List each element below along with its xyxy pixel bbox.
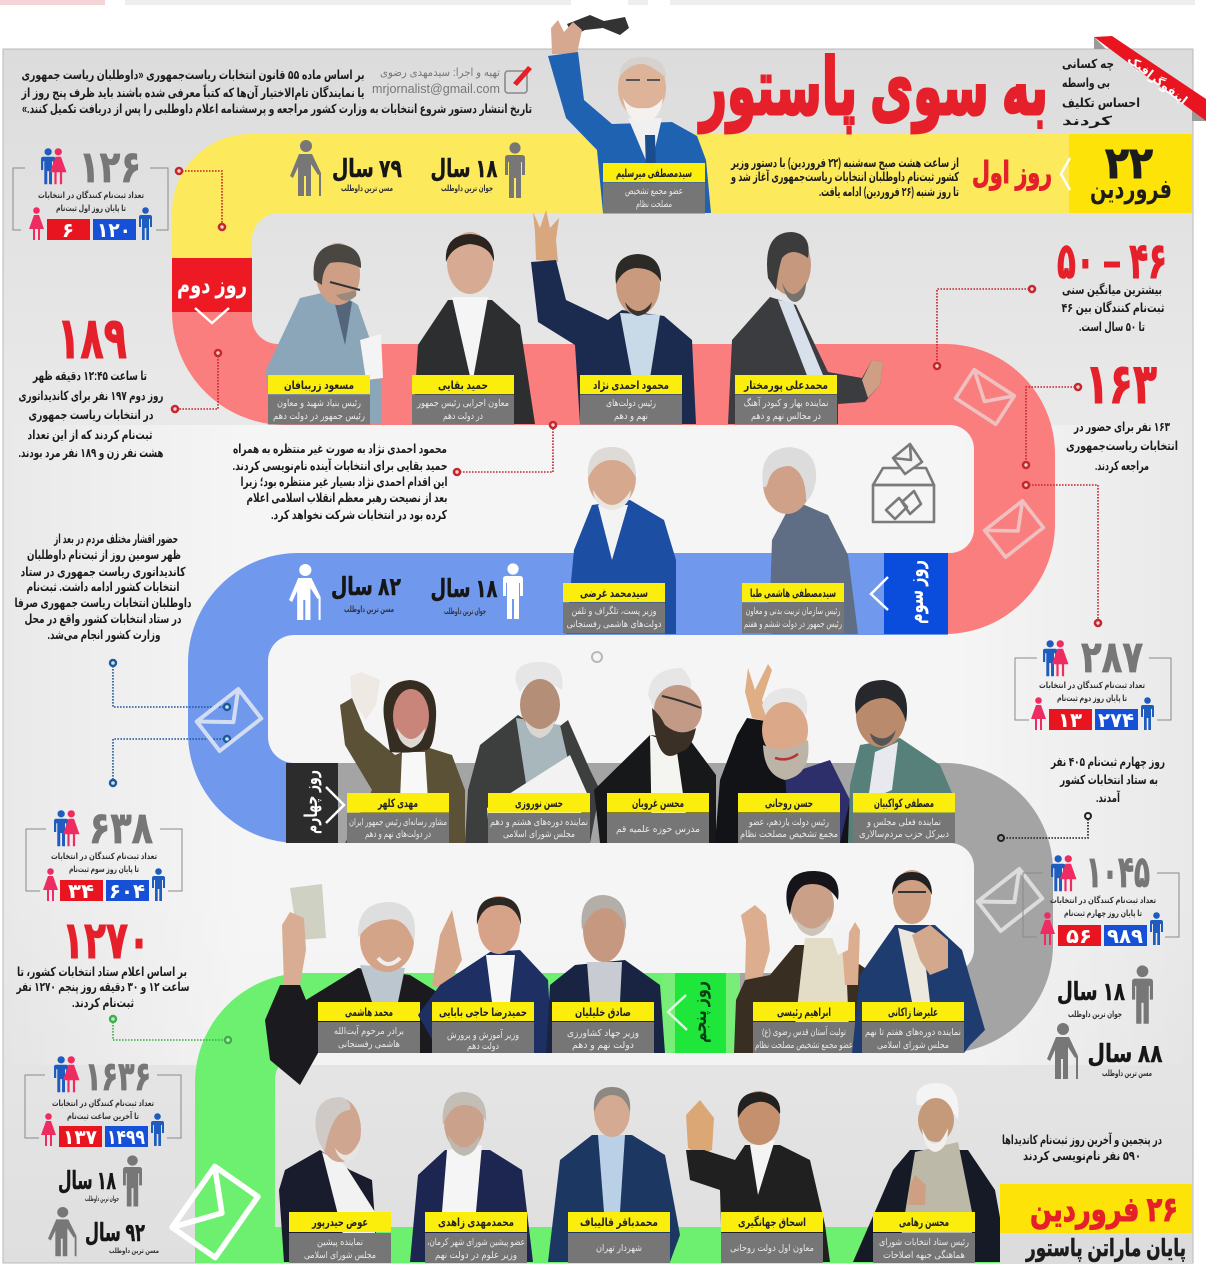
name label: حسن نوروزی xyxy=(515,798,563,811)
stat box: 1636: ۱۶۳۶ xyxy=(85,1055,151,1099)
stat: 189: ثبت‌نام کردند که از این تعداد xyxy=(28,428,152,443)
name label xyxy=(347,793,449,843)
name label xyxy=(412,375,514,424)
date number: ۲۲ xyxy=(1105,139,1153,188)
intro paragraph: یا نمایندگان تام‌الاختیار آن‌ها که کتباً معرفی شده باشند باید ظرف پنج روز از xyxy=(21,83,365,101)
name label xyxy=(268,375,370,424)
name label: رئیس دولت یازدهم، عضو xyxy=(748,817,829,828)
stat box: 287: تعداد ثبت‌نام کنندگان در انتخابات xyxy=(1039,680,1145,691)
name label: در مجالس نهم و دهم xyxy=(751,411,821,422)
day four note: آمدند. xyxy=(1096,790,1120,805)
name label: هماهنگی جبهه اصلاحات xyxy=(883,1249,965,1261)
day four note: به ستاد انتخابات کشور xyxy=(1059,773,1158,787)
candidate: Jahangiri xyxy=(686,1091,830,1263)
name label: وزیر پست، تلگراف و تلفن xyxy=(572,605,656,617)
name label xyxy=(607,793,709,843)
name label xyxy=(753,1002,855,1053)
name label: رئیس جمهور در دولت ششم و هفتم xyxy=(744,619,842,630)
name label: مسعود زرببافان xyxy=(284,380,354,393)
soft light area behind ribbon xyxy=(3,425,1193,1065)
name label: مجلس شورای اسلامی xyxy=(503,829,575,840)
name label xyxy=(580,375,682,424)
name label xyxy=(873,1212,975,1263)
stat: age range 46-50: تا ۵۰ سال است. xyxy=(1079,320,1145,334)
stat: 1270: ثبت‌نام کردند. xyxy=(72,996,134,1011)
name label: رئیس بنیاد شهید و معاون xyxy=(277,398,361,409)
connector: day four xyxy=(998,813,1091,841)
name label: محمد هاشمی xyxy=(345,1007,393,1019)
month: فروردین xyxy=(1090,174,1172,205)
ahmadinejad note xyxy=(232,442,448,522)
name label: مشاور رسانه‌ای رئیس جمهور ایران xyxy=(349,817,447,828)
connector: 126 xyxy=(176,168,225,230)
ahmadinejad note: کرده بود در انتخابات شرکت نخواهد کرد. xyxy=(271,508,448,522)
photo xyxy=(566,447,676,634)
stat: 189: ۱۸۹ xyxy=(57,306,127,371)
day two label xyxy=(172,258,252,323)
stat: 189: روز دوم ۱۹۷ نفر برای کاندیداتوری xyxy=(19,389,164,404)
stat: age range 46-50 xyxy=(1057,233,1167,334)
name label: نماینده فعلی مجلس و xyxy=(866,817,941,828)
oldest age day five: مسن ترین داوطلب xyxy=(109,1248,159,1255)
youngest age day three: جوان ترین داوطلب xyxy=(444,606,486,617)
ahmadinejad note: محمود احمدی نژاد به صورت غیر منتظره به همراه xyxy=(233,442,447,456)
name label xyxy=(289,1212,391,1263)
candidate: Kavakebian xyxy=(848,680,955,843)
stat box: 287 xyxy=(1015,633,1171,732)
stat: 1270: بر اساس اعلام ستاد انتخابات کشور، تا xyxy=(17,965,187,980)
oldest age xyxy=(332,155,402,194)
name label xyxy=(568,1212,670,1263)
name label: مهدی کلهر xyxy=(377,798,418,810)
name label xyxy=(853,793,955,843)
day one paragraph xyxy=(730,156,959,199)
ribbon: day one yellow xyxy=(172,134,1192,258)
name label xyxy=(563,583,665,634)
icon: envelope on blue ribbon xyxy=(197,689,261,751)
name label: هاشمی رفسنجانی xyxy=(338,1039,400,1050)
stat: 163 xyxy=(1066,352,1178,473)
stat box: 1045: ۹۸۹ xyxy=(1107,926,1143,948)
day one paragraph: تا روز شنبه (۲۶ فروردین) ادامه یافت. xyxy=(819,185,959,199)
blue ribbon note: داوطلبان انتخابات ریاست جمهوری صرفا xyxy=(14,596,192,610)
stat box: 1045: تعداد ثبت‌نام کنندگان در انتخابات xyxy=(1050,895,1156,906)
icon: envelope on red ribbon lower xyxy=(985,501,1043,557)
name label: رئیس جمهور در دولت دهم xyxy=(273,411,365,422)
stat box: 126: ۱۲۰ xyxy=(97,220,131,242)
youngest age day five: جوان ترین داوطلب xyxy=(85,1196,119,1203)
name label xyxy=(488,793,590,843)
name label: دبیرکل حزب مردم‌سالاری xyxy=(859,829,949,840)
day one paragraph: کشور ثبت‌نام داوطلبان انتخابات ریاست‌جمهوری آغاز شد و xyxy=(730,169,959,185)
top page strip xyxy=(0,0,1195,5)
name label: مجلس شورای اسلامی xyxy=(877,1040,949,1051)
name label xyxy=(735,375,837,424)
youngest age day three xyxy=(430,575,498,617)
icon: youngest candidate day one xyxy=(505,142,525,198)
stat box: 638 xyxy=(26,804,182,903)
youngest age xyxy=(430,155,498,194)
photo xyxy=(742,447,858,634)
oldest age: مسن ترین داوطلب xyxy=(341,183,393,194)
stat box: 287: ۲۷۴ xyxy=(1098,710,1134,732)
oldest age: ۷۹ سال xyxy=(332,155,402,183)
stat box: 126: ۱۲۶ xyxy=(79,143,141,192)
connector: 1270 xyxy=(110,1016,231,1043)
youngest age day four xyxy=(1057,978,1125,1020)
day four note xyxy=(1050,755,1165,805)
youngest age: جوان ترین داوطلب xyxy=(441,183,493,194)
side question xyxy=(1062,57,1140,128)
candidate: Gharazi xyxy=(563,447,676,634)
candidate: Hajibabaei xyxy=(418,896,552,1053)
name label: حسن روحانی xyxy=(765,798,813,811)
name label: عضو مجمع تشخیص مصلحت نظام xyxy=(755,1040,853,1051)
day one label: روز اول xyxy=(972,157,1052,191)
name label: نماینده بهار و کبودر آهنگ xyxy=(744,396,828,409)
blue ribbon note: حضور اقشار مختلف مردم در بعد از xyxy=(53,532,178,547)
intro paragraph: تاریخ انتشار دستور شروع انتخابات به وزارت کشور مراجعه و پرسشنامه اعلام داوطلبی را پس از دریافت تکمیل کنند.» xyxy=(22,102,532,117)
name label: معاون اجرایی رئیس جمهور xyxy=(416,398,509,409)
name label: برادر مرحوم آیت‌الله xyxy=(334,1024,404,1037)
stat box: 638: ۶۳۸ xyxy=(89,804,153,853)
name label: مصلحت نظام xyxy=(636,199,672,210)
stat box: 1636: ۱۴۹۹ xyxy=(107,1127,145,1149)
blue ribbon note: کاندیداتوری ریاست جمهوری در ستاد xyxy=(20,565,186,579)
credits: تهیه و اجرا: سیدمهدی رضوی xyxy=(380,67,500,79)
name label: نماینده دوره‌های هشتم و دهم xyxy=(490,817,588,828)
stat: 1270: ۱۲۷۰ xyxy=(62,912,150,970)
ahmadinejad note: حمید بقایی برای انتخابات آینده نام‌نویسی کردند. xyxy=(232,458,448,474)
stat box: 126: تا پایان روز اول ثبت‌نام xyxy=(56,203,126,214)
youngest age day four: جوان ترین داوطلب xyxy=(1068,1009,1122,1020)
stat box: 638: ۳۴ xyxy=(68,881,94,903)
name label xyxy=(721,1212,823,1263)
stat box: 1045: ۵۶ xyxy=(1066,926,1092,948)
photo xyxy=(594,668,716,843)
stat box: 638: تا پایان روز سوم ثبت‌نام xyxy=(69,864,139,875)
name label: محمدعلی پورمختار xyxy=(743,380,828,393)
icon: envelope on gray ribbon xyxy=(978,869,1042,931)
photo xyxy=(265,884,450,1085)
photo xyxy=(728,232,883,424)
name label: محمدباقر قالیباف xyxy=(580,1217,658,1229)
candidate: Rahami xyxy=(853,1083,1008,1263)
name label: سیدمصطفی هاشمی طبا xyxy=(750,588,836,600)
name label xyxy=(552,1002,654,1053)
youngest age day five: ۱۸ سال xyxy=(58,1167,116,1195)
photo xyxy=(410,1092,533,1262)
name label: شهردار تهران xyxy=(596,1243,642,1254)
name label: محسن غرویان xyxy=(632,798,684,811)
side question: کردند xyxy=(1062,114,1113,128)
day three label xyxy=(871,553,948,634)
intro paragraph: بر اساس ماده ۵۵ قانون انتخابات ریاست‌جمهوری «داوطلبان ریاست جمهوری xyxy=(21,68,365,82)
ahmadinejad note: بعد از نصیحت رهبر معظم انقلاب اسلامی اعلام xyxy=(246,491,448,506)
blue ribbon note: ظهر سومین روز از ثبت‌نام داوطلبان xyxy=(27,548,181,563)
name label: عوض حیدرپور xyxy=(311,1217,368,1230)
candidate: Khalilian xyxy=(546,895,665,1053)
stat box: 1045: تا پایان روز چهارم ثبت‌نام xyxy=(1064,908,1142,919)
name label: رئیس دولت‌های xyxy=(606,398,656,409)
final day note xyxy=(1002,1132,1162,1164)
side question: چه کسانی xyxy=(1062,57,1114,71)
photo xyxy=(852,870,985,1053)
photo xyxy=(279,1097,378,1262)
stat box: 638: ۶۰۴ xyxy=(109,881,145,903)
stat: 163: ۱۶۳ xyxy=(1085,352,1157,415)
icon: oldest candidate day three xyxy=(289,564,321,620)
ribbon: day three blue xyxy=(188,553,948,843)
stat box: 287: ۱۳ xyxy=(1058,710,1082,732)
photo xyxy=(465,662,600,843)
blue ribbon note xyxy=(14,532,192,643)
name label: معاون اول دولت روحانی xyxy=(730,1243,814,1254)
name label xyxy=(318,1002,420,1053)
day two label: روز دوم xyxy=(177,272,247,299)
youngest age day four: ۱۸ سال xyxy=(1057,978,1125,1006)
blue ribbon note: در ستاد انتخابات کشور واقع در محل xyxy=(24,612,182,626)
name label: عضو مجمع تشخیص xyxy=(625,186,683,197)
connector: ahmadinejad note xyxy=(454,422,556,475)
final date box: ۲۶ فروردین xyxy=(1030,1191,1178,1230)
oldest age day four: ۸۸ سال xyxy=(1088,1040,1162,1068)
day four note: روز چهارم ثبت‌نام ۴۰۵ نفر xyxy=(1050,755,1165,770)
candidate: Heidarpour xyxy=(279,1097,391,1263)
intro paragraph xyxy=(21,68,532,117)
icon: envelope on red ribbon xyxy=(956,370,1014,424)
stat: age range 46-50: ۴۶ – ۵۰ xyxy=(1057,233,1167,289)
icon: oldest candidate day one xyxy=(290,140,321,196)
name label: مصطفی کواکبیان xyxy=(874,798,934,811)
stat: 163: ۱۶۳ نفر برای حضور در xyxy=(1073,420,1170,434)
oldest age day four: مسن ترین داوطلب xyxy=(1102,1068,1152,1079)
name label: دولت نهم و دهم xyxy=(572,1040,634,1051)
name label: سیدمصطفی میرسلیم xyxy=(616,168,692,180)
ribbon: day two red xyxy=(172,258,1055,634)
ribbon: day five green xyxy=(195,973,1000,1263)
final day note: ۵۹۰ نفر نام‌نویسی کردند xyxy=(1023,1149,1141,1164)
name label: حمیدرضا حاجی بابایی xyxy=(439,1007,527,1019)
name label: وزیر آموزش و پرورش xyxy=(447,1028,519,1041)
name label: مجمع تشخیص مصلحت نظام xyxy=(740,829,838,840)
candidate: Norouzi xyxy=(465,662,600,843)
blue ribbon note: وزارت کشور انجام می‌شد. xyxy=(48,628,160,643)
name label: محمود احمدی نژاد xyxy=(593,380,669,393)
day one date box xyxy=(1061,134,1192,213)
photo xyxy=(548,15,711,213)
connector: 189 xyxy=(172,350,221,412)
icon: oldest candidate day five xyxy=(48,1207,77,1256)
candidate: Rouhani xyxy=(715,664,860,843)
blue ribbon note: انتخابات کشور ادامه داشت. ثبت‌نام xyxy=(26,580,180,595)
day four label xyxy=(286,763,344,843)
name label: حمید بقایی xyxy=(438,380,488,392)
photo xyxy=(686,1091,830,1262)
ahmadinejad note: این اقدام احمدی نژاد بسیار غیر منتظره بود؛ زیرا xyxy=(240,475,448,490)
photo xyxy=(546,895,665,1053)
candidate: Zakani xyxy=(852,870,985,1053)
stat: 1270 xyxy=(16,912,190,1011)
candidate: Zarrabafan xyxy=(266,243,383,424)
name label: رئیس ستاد انتخابات شورای xyxy=(879,1237,969,1248)
name label: مجلس شورای اسلامی xyxy=(304,1250,376,1261)
icon: youngest candidate day four xyxy=(1132,965,1153,1024)
photo xyxy=(413,232,535,424)
name label: دولت‌های هاشمی رفسنجانی xyxy=(566,619,662,630)
day three label: روز سوم xyxy=(903,560,929,624)
icon: ballot box xyxy=(873,444,934,522)
candidate: Ahmadinejad xyxy=(531,210,696,424)
photo xyxy=(418,896,552,1053)
connector: blue upper xyxy=(110,660,230,710)
day four label: روز چهارم xyxy=(301,770,322,834)
corner ribbon infographic: اینفوگرافیک xyxy=(1124,52,1190,108)
name label: دولت دهم xyxy=(467,1041,499,1052)
icon: oldest candidate day four xyxy=(1047,1023,1078,1079)
candidate: Ghalibaf xyxy=(548,1087,680,1263)
name label: سیدمحمد غرضی xyxy=(580,588,648,600)
side question: بی واسطه xyxy=(1062,76,1110,90)
name label xyxy=(862,1002,964,1053)
photo xyxy=(734,871,868,1053)
name label: نماینده پیشین xyxy=(317,1237,363,1248)
stat: 189 xyxy=(18,306,164,460)
oldest age day three: ۸۲ سال xyxy=(331,573,401,601)
name label xyxy=(738,793,840,843)
name label: وزیر جهاد کشاورزی xyxy=(567,1028,639,1039)
name label: در دولت‌های نهم و دهم xyxy=(365,829,431,840)
stat box: 126 xyxy=(13,143,168,242)
stat box: 126: تعداد ثبت‌نام کنندگان در انتخابات xyxy=(38,190,144,201)
day five label xyxy=(663,973,740,1053)
name label: تولیت آستان قدس رضوی (ع) xyxy=(762,1025,846,1038)
name label: محسن رهامی xyxy=(899,1217,949,1229)
small ring marker xyxy=(592,652,602,662)
youngest age day three: ۱۸ سال xyxy=(430,575,498,603)
stat box: 287: ۲۸۷ xyxy=(1081,633,1143,682)
name label xyxy=(742,583,844,634)
connector: blue lower xyxy=(110,736,230,786)
candidate: Gharavian xyxy=(594,668,716,843)
name label xyxy=(603,163,705,214)
candidate: Hashemi-Taba xyxy=(742,447,858,634)
oldest age day five: ۹۲ سال xyxy=(85,1219,145,1247)
credits xyxy=(372,67,500,96)
name label: نماینده دوره‌های هفتم تا نهم xyxy=(865,1027,961,1038)
icon: youngest candidate day five xyxy=(123,1155,142,1207)
stat box: 638: تعداد ثبت‌نام کنندگان در انتخابات xyxy=(51,851,157,862)
side question: احساس تکلیف xyxy=(1062,96,1140,110)
stat: 189: هشت نفر زن و ۱۸۹ نفر مرد بودند. xyxy=(18,446,164,460)
credits: mrjornalist@gmail.com xyxy=(372,81,500,96)
stat box: 287: تا پایان روز دوم ثبت‌نام xyxy=(1057,693,1127,704)
oldest age day four xyxy=(1088,1040,1162,1079)
stat box: 1636 xyxy=(25,1055,181,1149)
photo xyxy=(548,1087,680,1262)
candidate: Baghaei xyxy=(412,232,535,424)
stat box: 1045 xyxy=(1023,848,1179,948)
final date box xyxy=(1000,1184,1192,1263)
name label: رئیس سازمان تربیت بدنی و معاون xyxy=(746,606,841,617)
photo xyxy=(853,1083,1008,1262)
connector: 163 xyxy=(1023,384,1081,468)
chevron xyxy=(1061,158,1070,190)
name label: مدرس حوزه علمیه قم xyxy=(616,824,700,835)
name label: در دولت دهم xyxy=(443,411,483,422)
name label: محمدمهدی زاهدی xyxy=(438,1217,514,1229)
name label: اسحاق جهانگیری xyxy=(738,1215,806,1229)
name label: علیرضا زاکانی xyxy=(888,1007,938,1019)
oldest age day three xyxy=(331,573,401,615)
photo xyxy=(715,664,860,843)
stat box: 126: ۶ xyxy=(62,220,74,242)
candidate: Mirsalim xyxy=(548,15,711,214)
photo xyxy=(340,672,465,843)
name label: وزیر علوم در دولت نهم xyxy=(435,1250,517,1261)
candidate: Kalhor xyxy=(340,672,465,843)
name label xyxy=(425,1212,527,1263)
stat: age range 46-50: ثبت‌نام کنندگان بین ۴۶ xyxy=(1062,300,1164,316)
icon: pen and note xyxy=(505,66,532,93)
name label: صادق خلیلیان xyxy=(575,1007,631,1019)
candidate: Zahedi xyxy=(410,1092,533,1263)
photo xyxy=(848,680,955,843)
stat: 1270: ساعت ۱۲ و ۳۰ دقیقه روز پنجم ۱۲۷۰ نفر xyxy=(16,980,190,994)
stat box: 1636: ۱۳۷ xyxy=(63,1127,97,1149)
photo xyxy=(266,243,383,424)
stat: age range 46-50: بیشترین میانگین سنی xyxy=(1062,282,1162,297)
photo xyxy=(531,210,696,424)
candidate: Mohammad Hashemi xyxy=(265,884,450,1085)
name label: عضو پیشین شورای شهر کرمان، xyxy=(427,1237,525,1248)
youngest age: ۱۸ سال xyxy=(430,155,498,183)
stat: 189: تا ساعت ۱۲:۴۵ دقیقه ظهر xyxy=(32,369,147,383)
connector: to 287 xyxy=(1023,482,1101,626)
day one paragraph: از ساعت هشت صبح سه‌شنبه (۲۲ فروردین) با دستور وزیر xyxy=(730,156,959,170)
name label: ابراهیم رئیسی xyxy=(777,1007,831,1019)
oldest age day three: مسن ترین داوطلب xyxy=(344,604,394,615)
ribbon: day four gray xyxy=(300,763,1053,1053)
stat: 163: مراجعه کردند. xyxy=(1095,459,1149,473)
connector: age range xyxy=(934,286,1035,369)
stat box: 1636: تا آخرین ساعت ثبت‌نام xyxy=(67,1110,139,1122)
name label xyxy=(432,1002,534,1053)
day five label: روز پنجم xyxy=(690,981,711,1043)
icon: youngest candidate day three xyxy=(503,563,523,619)
corner ribbon infographic xyxy=(1094,36,1206,121)
icon: envelope on green ribbon xyxy=(172,1166,258,1258)
candidate: Raisi xyxy=(734,871,868,1053)
candidate: Pourmokhtar xyxy=(728,232,883,424)
stat: 189: در انتخابات ریاست جمهوری xyxy=(28,408,154,422)
name label: نهم و دهم xyxy=(614,411,648,422)
stat box: 1045: ۱۰۴۵ xyxy=(1086,848,1150,897)
stat: 163: انتخابات ریاست‌جمهوری xyxy=(1066,439,1178,453)
stat box: 1636: تعداد ثبت‌نام کنندگان در انتخابات xyxy=(52,1098,154,1109)
